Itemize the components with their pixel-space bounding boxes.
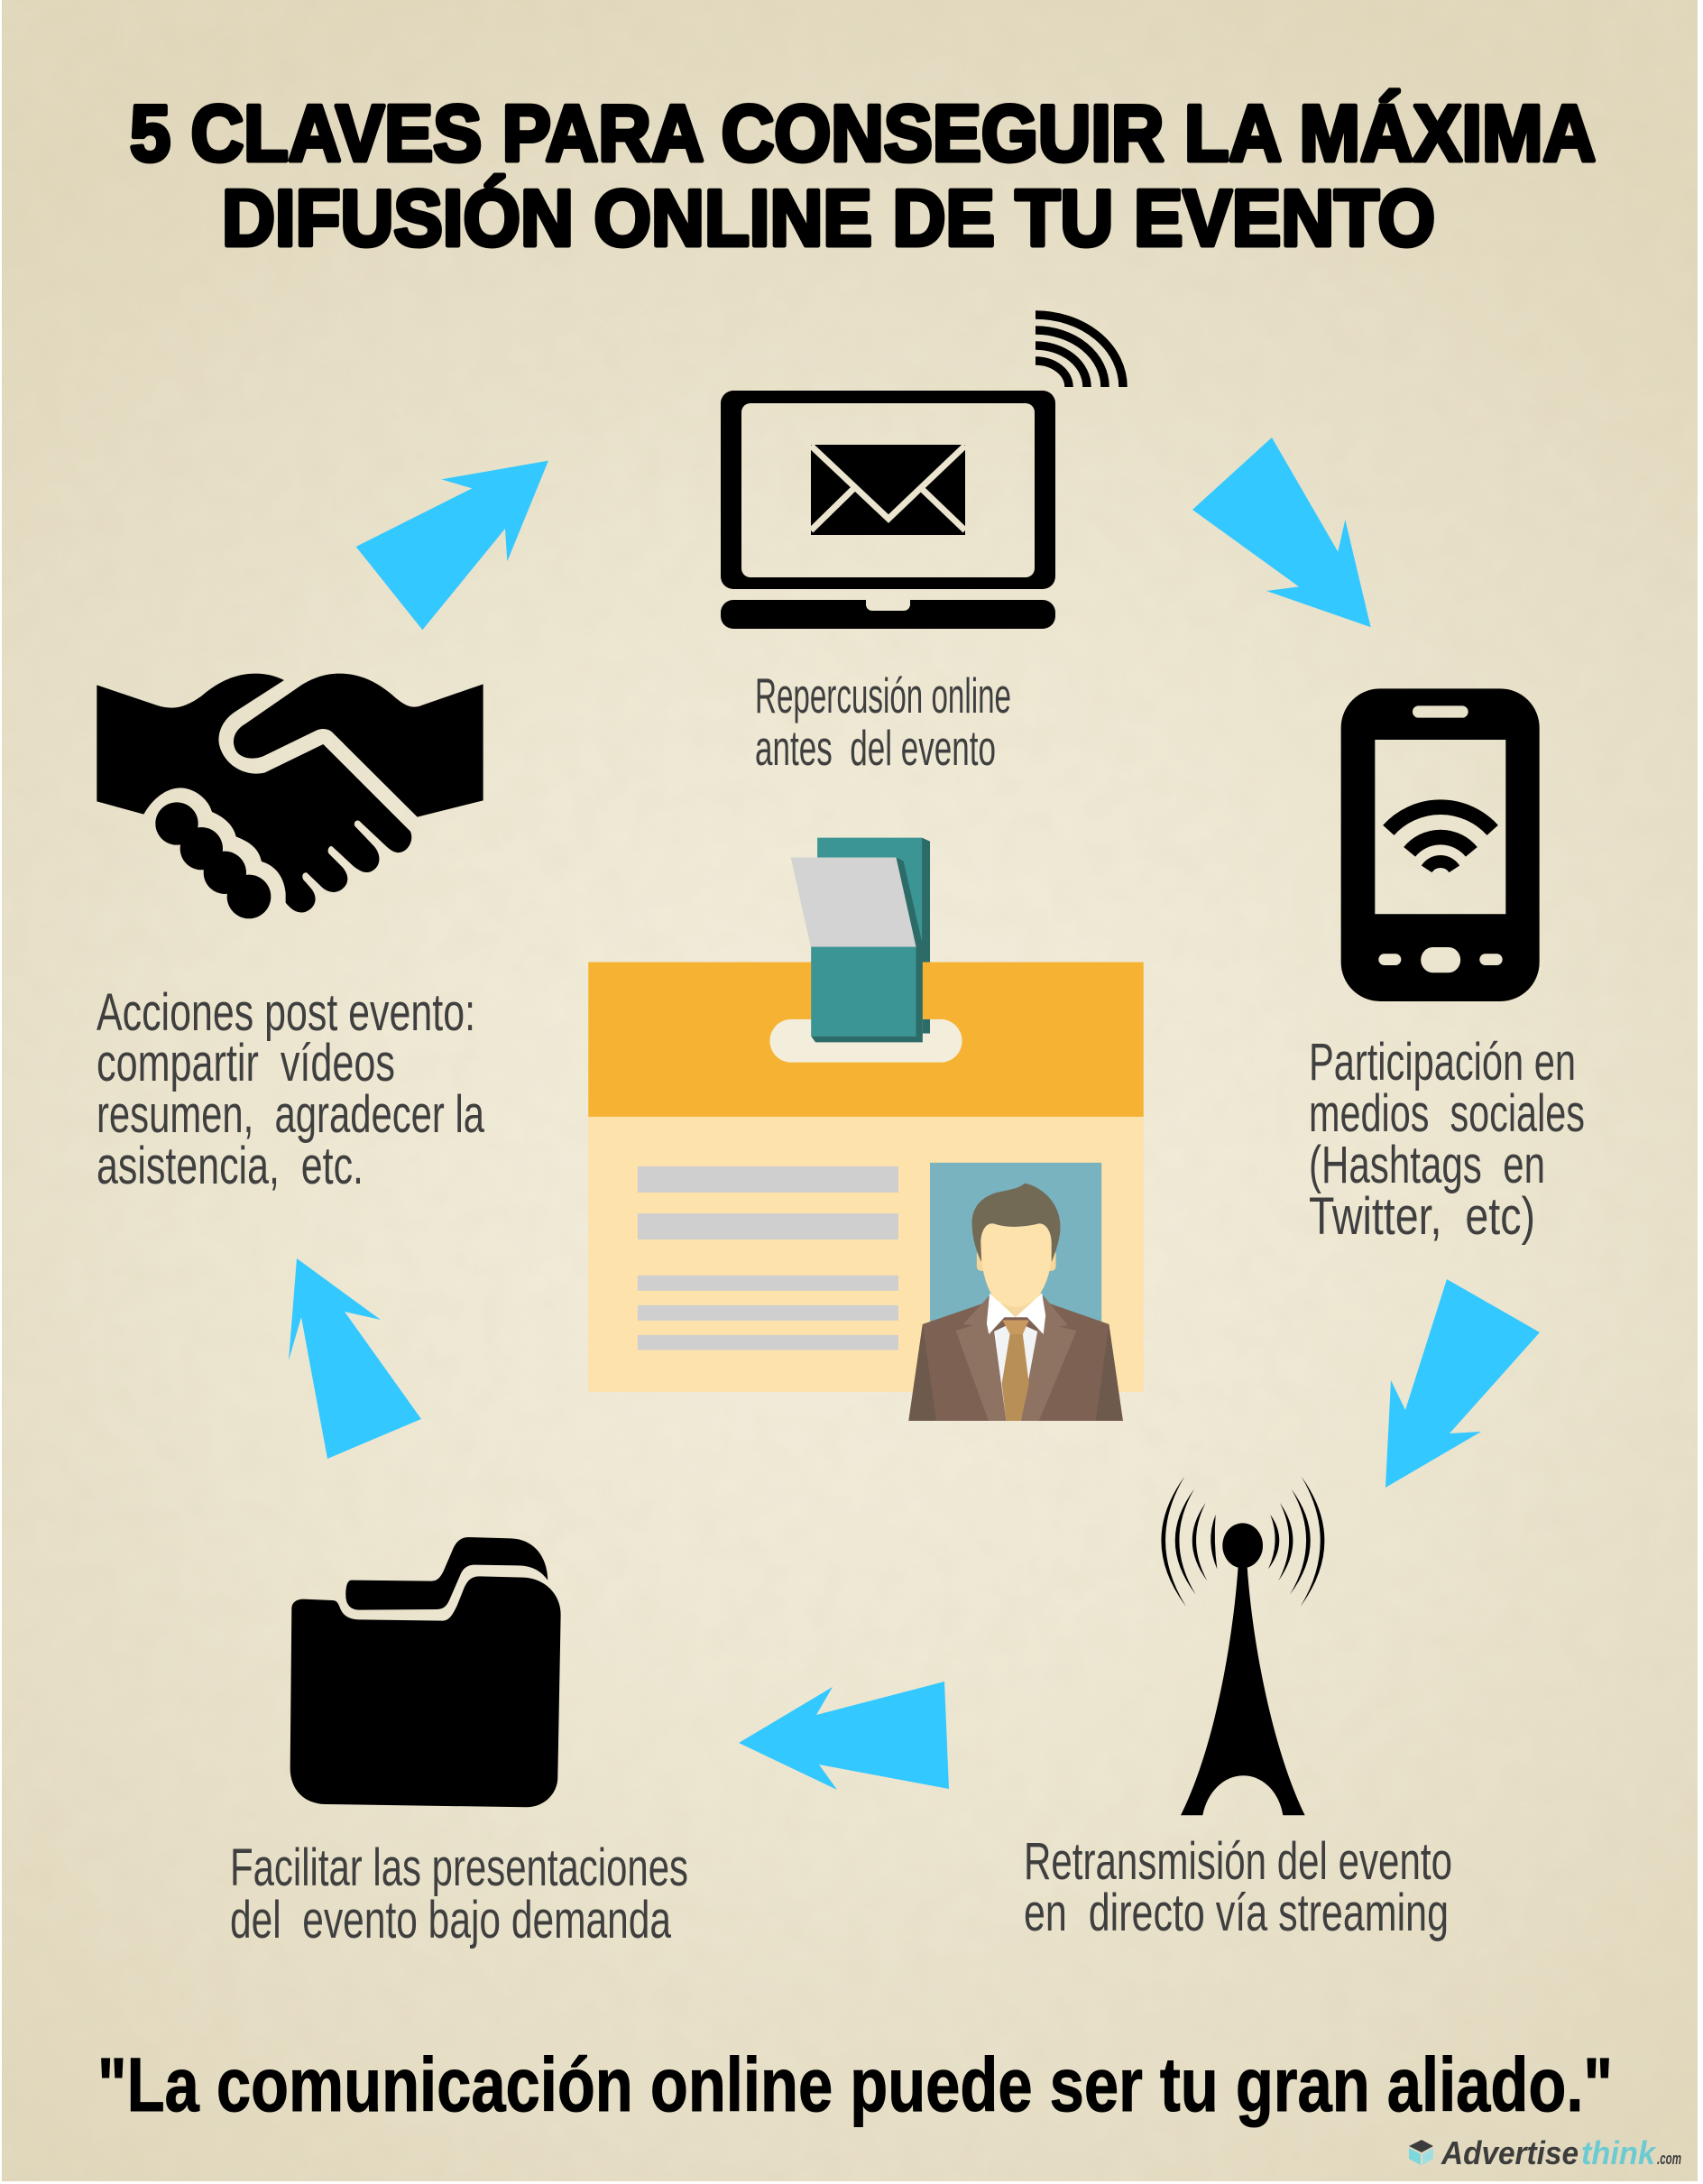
logo: AdvertiseThink — [1409, 2134, 1681, 2171]
caption: participacion en medios sociales: (Hashtags en — [1309, 1136, 1545, 1194]
caption: presentaciones bajo demanda: del evento bajo demanda — [230, 1891, 672, 1949]
arrow: laptop to phone — [1192, 438, 1371, 627]
caption: acciones post evento: asistencia, etc. — [97, 1137, 364, 1195]
caption: acciones post evento: compartir vídeos — [97, 1034, 395, 1092]
caption: repercusion online: Repercusión online — [755, 668, 1011, 723]
photo background — [930, 1163, 1101, 1336]
antenna signal waves — [1161, 1477, 1324, 1607]
person portrait — [908, 1184, 1123, 1421]
signal arcs — [1036, 315, 1123, 387]
icon: folder — [290, 1537, 561, 1807]
lanyard clip — [791, 838, 930, 1042]
caption: participacion en medios sociales — [1309, 1033, 1585, 1246]
caption: participacion en medios sociales: Participación en — [1309, 1033, 1576, 1092]
badge body — [588, 1117, 1144, 1392]
text placeholder lines — [638, 1166, 898, 1350]
caption: retransmision en streaming: Retransmisión del evento — [1024, 1832, 1452, 1891]
laptop screen — [721, 391, 1055, 589]
caption: presentaciones bajo demanda: Facilitar las presentaciones — [230, 1838, 688, 1897]
logo: AdvertiseThink: Advertise — [1441, 2134, 1579, 2171]
title: DIFUSIÓN ONLINE DE TU EVENTO — [222, 173, 1435, 263]
caption: acciones post evento: Acciones post evento: — [97, 983, 475, 1042]
central illustration: event badge — [588, 838, 1144, 1421]
arrow: antenna to folder — [739, 1682, 949, 1790]
caption: repercusion online — [755, 668, 1011, 776]
arrow: top-left to laptop — [356, 461, 548, 630]
lanyard slot — [769, 1019, 962, 1063]
icon: smartphone — [1341, 688, 1540, 1001]
right hand — [234, 674, 483, 817]
badge header — [588, 963, 1144, 1117]
logo: AdvertiseThink: think — [1581, 2134, 1657, 2171]
knuckles — [155, 802, 271, 918]
logo: AdvertiseThink: .com — [1657, 2150, 1681, 2168]
logo cube — [1409, 2140, 1433, 2165]
title: 5 CLAVES PARA CONSEGUIR LA MÁXIMA — [130, 88, 1596, 178]
envelope — [811, 445, 965, 535]
icon: broadcast antenna — [1161, 1477, 1324, 1815]
title — [130, 88, 1596, 263]
caption: presentaciones bajo demanda — [230, 1838, 688, 1949]
phone wifi symbol — [1388, 807, 1493, 869]
caption: retransmision en streaming: en directo vía streaming — [1024, 1884, 1449, 1942]
arrow: folder to handshake — [289, 1258, 421, 1459]
icon: laptop with envelope and signal — [721, 315, 1123, 629]
icon: handshake — [97, 674, 483, 918]
caption: participacion en medios sociales: medios sociales — [1309, 1084, 1585, 1143]
arrow: phone to antenna — [1385, 1279, 1540, 1488]
laptop base — [721, 600, 1055, 629]
caption: repercusion online: antes del evento — [755, 720, 996, 776]
caption: acciones post evento — [97, 983, 485, 1195]
caption: retransmision en streaming — [1024, 1832, 1452, 1942]
caption: participacion en medios sociales: Twitter, etc) — [1309, 1187, 1535, 1246]
left hand — [97, 674, 411, 912]
caption: acciones post evento: resumen, agradecer la — [97, 1085, 485, 1144]
